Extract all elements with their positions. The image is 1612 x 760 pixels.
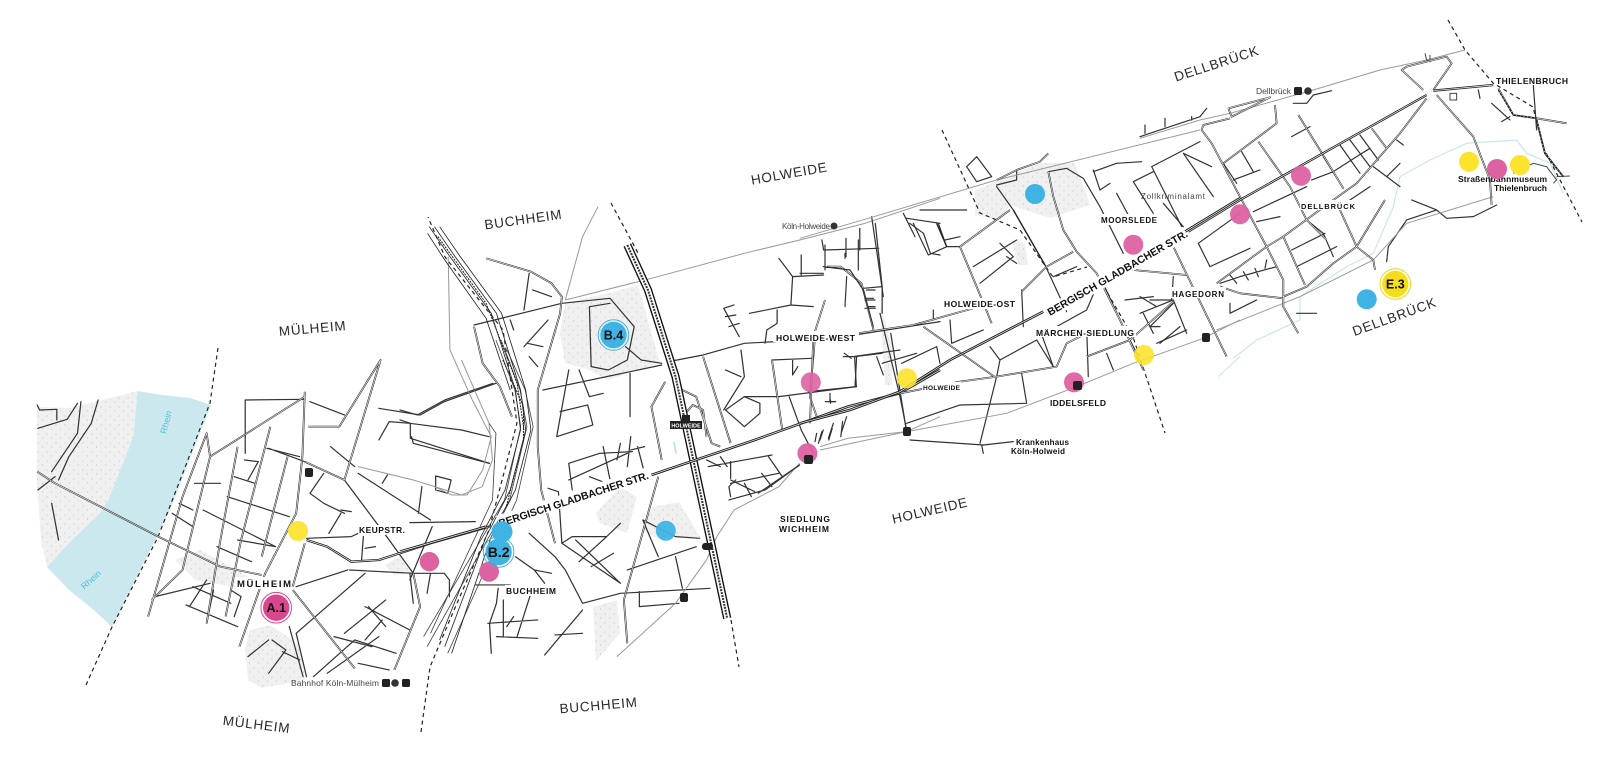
markers (261, 152, 1530, 623)
label Hagedorn (1170, 287, 1226, 299)
marker: B.2 (483, 537, 514, 567)
label Dellbrück station (1256, 86, 1312, 96)
marker: yellow Hagedorn (1134, 345, 1154, 365)
tram stop badges (305, 333, 1210, 602)
marker: yellow Mülheim (288, 521, 308, 541)
marker: pink Moorslede (1123, 235, 1143, 255)
label Zollkriminalamt: Zollkriminalamt (1141, 192, 1206, 201)
road name east: BERGISCH GLADBACHER STR. (1046, 228, 1190, 319)
marker: B.2: B.2 (488, 544, 510, 560)
label Hagedorn: HAGEDORN (1172, 290, 1224, 299)
marker: E.3: E.3 (1386, 278, 1405, 292)
district: Dellbrück north: DELLBRÜCK (1172, 43, 1261, 84)
marker: yellow museum 2 (1510, 155, 1530, 175)
marker: pink Wichheim stop (797, 443, 817, 463)
label Dellbrück station: Dellbrück (1256, 86, 1292, 96)
marker: blue Wichheim (656, 521, 676, 541)
label Siedlung Wichheim: SIEDLUNG (780, 514, 830, 524)
district: Buchheim south: BUCHHEIM (559, 695, 638, 716)
district: Holweide north: HOLWEIDE (750, 159, 829, 188)
label Holweide-West: HOLWEIDE-WEST (776, 333, 856, 343)
Holweide stop sign on motorway (670, 415, 702, 430)
marker: A.1 (261, 592, 292, 623)
label Siedlung Wichheim (779, 514, 830, 534)
label Krankenhaus Köln-Holweid: Köln-Holweid (1011, 447, 1065, 456)
label Iddelsfeld: IDDELSFELD (1050, 398, 1106, 408)
street network: Buchheim and Holweide-West (400, 198, 940, 657)
label Mülheim: MÜLHEIM (237, 579, 291, 590)
label Buchheim: BUCHHEIM (506, 586, 556, 596)
district: Buchheim north: BUCHHEIM (484, 207, 563, 232)
marker: pink Dellbrück south (1230, 204, 1250, 224)
marker: pink Keupstr (420, 552, 439, 571)
marker: pink Holweide-West (801, 372, 821, 392)
street and place labels (235, 75, 1570, 688)
label Straßenbahnmuseum Thielenbruch: Straßenbahnmuseum (1458, 174, 1547, 184)
label Köln-Holweide station: Köln-Holweide (782, 222, 831, 231)
label Straßenbahnmuseum Thielenbruch: Thielenbruch (1494, 183, 1547, 193)
street network: Dellbrück and Thielenbruch (1140, 50, 1570, 358)
label Märchen-Siedlung: MÄRCHEN-SIEDLUNG (1036, 328, 1134, 338)
Holweide stop sign on motorway: HOLWEIDE (671, 424, 701, 430)
label Holweide small (922, 382, 961, 392)
marker: pink museum (1487, 159, 1507, 179)
marker: blue near B.2 (492, 521, 512, 542)
marker: pink Iddelsfeld (1064, 372, 1084, 392)
district names (222, 43, 1438, 736)
marker: B.4 (598, 320, 629, 350)
marker: E.3 (1380, 269, 1411, 299)
label Moorslede: MOORSLEDE (1101, 216, 1158, 225)
marker: blue Holweide-Ost (1025, 184, 1045, 204)
marker: A.1: A.1 (266, 601, 286, 615)
district: Mülheim south: MÜLHEIM (222, 713, 291, 736)
label Straßenbahnmuseum Thielenbruch (1458, 174, 1547, 193)
marker: yellow Holweide (897, 368, 917, 388)
river label bottom: Rhein (79, 568, 103, 591)
label Krankenhaus Köln-Holweid: Krankenhaus (1016, 438, 1070, 447)
street network: Mülheim (37, 340, 533, 677)
district: Mülheim north: MÜLHEIM (278, 318, 347, 339)
marker: B.4: B.4 (604, 328, 623, 342)
river Rhein (47, 391, 211, 627)
street network: Holweide-Ost (800, 130, 1240, 453)
green and park areas (37, 163, 1090, 688)
marker: pink Dellbrück north (1291, 166, 1311, 186)
label Dellbrück: DELLBRÜCK (1301, 202, 1356, 211)
label Holweide-Ost: HOLWEIDE-OST (944, 299, 1016, 309)
marker: yellow museum 1 (1459, 152, 1479, 172)
label Keupstr: KEUPSTR. (359, 525, 405, 535)
marker: pink Bergisch Gladbach west (479, 562, 499, 582)
tram stop badges over markers (804, 381, 1082, 464)
marker: blue Dellbrück east (1357, 289, 1377, 309)
label Holweide small: HOLWEIDE (923, 385, 961, 392)
district: Holweide south: HOLWEIDE (891, 495, 969, 527)
label Bahnhof Köln-Mülheim: Bahnhof Köln-Mülheim (291, 678, 379, 688)
district: Dellbrück south: DELLBRÜCK (1350, 295, 1438, 339)
river label top: Rhein (158, 410, 174, 435)
road name west: BERGISCH GLADBACHER STR. (497, 470, 650, 530)
label Krankenhaus Köln-Holweid (1011, 438, 1070, 456)
label Siedlung Wichheim: WICHHEIM (779, 524, 829, 534)
label Thielenbruch: THIELENBRUCH (1496, 76, 1568, 86)
